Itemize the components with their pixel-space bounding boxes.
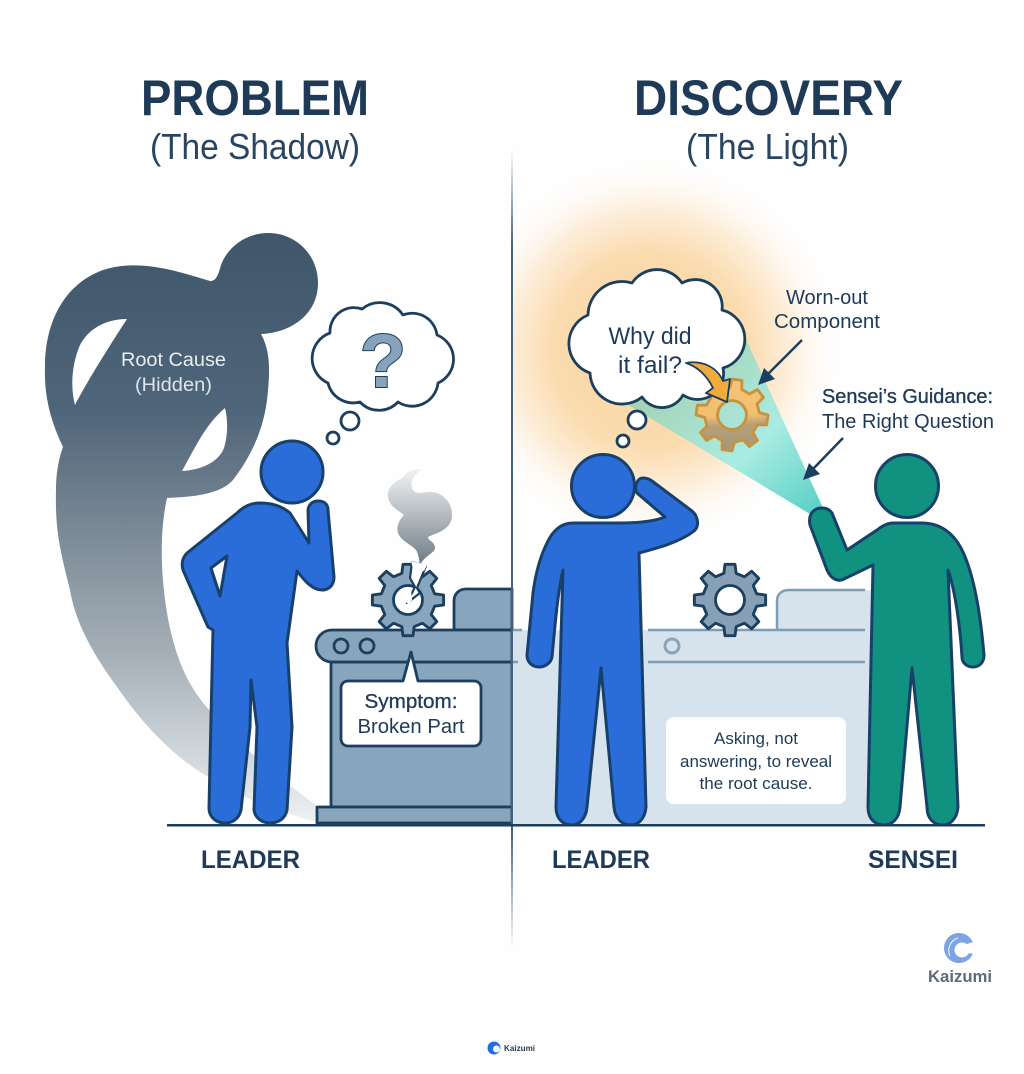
- label: root cause: [121, 350, 226, 396]
- label: sensei's guidance: Sensei’s Guidance:: [822, 386, 993, 408]
- label: sensei: SENSEI: [868, 846, 958, 874]
- callout: symptom: [341, 652, 481, 746]
- heading: problem: PROBLEM: [141, 70, 369, 126]
- label: leader: LEADER: [201, 846, 300, 874]
- panel: discovery side: [513, 70, 994, 874]
- note: asking not answering: the root cause.: [700, 774, 812, 793]
- note: asking not answering: answering, to reveal: [680, 752, 832, 771]
- icon: broken gear: [372, 561, 444, 636]
- ground line: [167, 824, 985, 826]
- note: asking not answering: Asking, not: [714, 729, 798, 748]
- callout: symptom: Broken Part: [358, 716, 465, 738]
- label: sensei's guidance: [822, 386, 994, 433]
- thought bubble with question mark: [312, 303, 454, 444]
- label: root cause: Root Cause: [121, 350, 226, 371]
- label: root cause: (Hidden): [135, 375, 212, 396]
- logo: kaizumi large: [928, 933, 992, 986]
- heading: discovery: (The Light): [686, 126, 849, 167]
- logo: kaizumi large: Kaizumi: [928, 967, 992, 986]
- thought bubble: why did it fail: [569, 270, 745, 447]
- hidden root cause shadow figure: [45, 233, 318, 822]
- label: worn-out component: Component: [774, 311, 880, 333]
- icon: worn-out golden gear: [692, 375, 772, 455]
- label: leader: LEADER: [552, 846, 650, 874]
- center divider: [511, 150, 513, 950]
- panel: problem side: [45, 70, 512, 874]
- faded machine: [513, 590, 872, 824]
- label: worn-out component: [774, 287, 880, 333]
- label: worn-out component: Worn-out: [786, 287, 868, 309]
- panel: discovery light background glow: [513, 150, 853, 550]
- label: sensei's guidance: The Right Question: [822, 411, 994, 433]
- icon: smoke: [388, 469, 452, 566]
- thought bubble with question mark: ?: [360, 319, 406, 404]
- heading: problem: [141, 70, 369, 167]
- arrow: to worn-out gear: [758, 340, 802, 385]
- note: asking not answering: [666, 717, 846, 804]
- logo: kaizumi small footer: [488, 1042, 535, 1054]
- broken machine: [316, 589, 512, 823]
- thought bubble: why did it fail: it fail?: [618, 352, 682, 379]
- icon: intact gear: [694, 564, 766, 636]
- heading: discovery: DISCOVERY: [634, 70, 903, 126]
- leader figure, thinking: [527, 454, 698, 825]
- leader figure, confused: [182, 441, 334, 823]
- heading: discovery: [634, 70, 903, 167]
- arrow: curved orange pointing at gear: [686, 362, 730, 402]
- logo: kaizumi small footer: Kaizumi: [504, 1044, 535, 1053]
- callout: symptom: Symptom:: [364, 691, 458, 713]
- light beam from sensei: [620, 337, 823, 514]
- arrow: to light beam: [803, 438, 843, 480]
- thought bubble: why did it fail: Why did: [608, 323, 692, 350]
- sensei figure, pointing: [810, 454, 984, 825]
- heading: problem: (The Shadow): [150, 126, 360, 167]
